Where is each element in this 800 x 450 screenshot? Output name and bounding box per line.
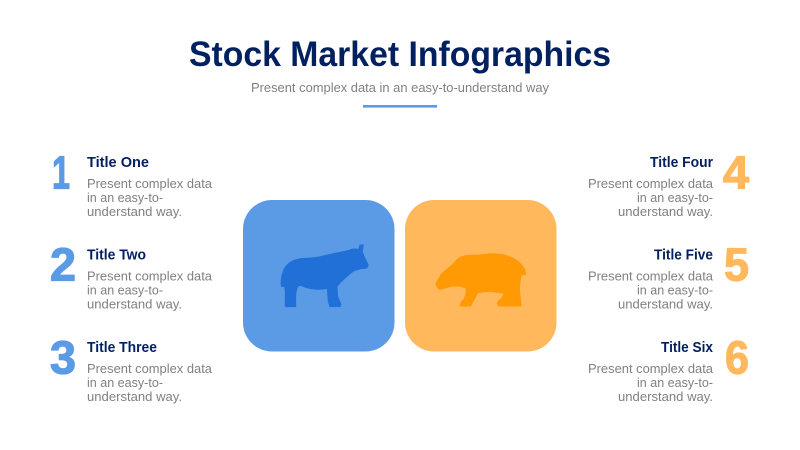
item 5 text: Present complex data: [588, 270, 713, 284]
item 3: [50, 332, 212, 404]
item 2 heading: Title Two: [87, 246, 146, 264]
item 4 heading: Title Four: [650, 154, 713, 171]
icon: bull: [281, 245, 368, 307]
title underline: [363, 105, 437, 108]
item 6 text: Present complex data: [588, 362, 713, 376]
item 6 text: understand way.: [618, 390, 713, 404]
title: Stock Market Infographics: [189, 35, 611, 74]
item 5 text: [588, 270, 713, 312]
item 1 heading: Title One: [87, 154, 149, 171]
item 3 text: Present complex data: [87, 362, 212, 376]
number 2: 2: [50, 238, 76, 290]
panel: bear: [405, 200, 556, 352]
item 1 text: Present complex data: [87, 177, 212, 191]
item 2 text: Present complex data: [87, 270, 212, 284]
item 3 text: [87, 362, 212, 404]
item 2 text: [87, 270, 212, 312]
item 5: [588, 238, 749, 312]
item 6 text: in an easy-to-: [637, 376, 713, 390]
item 6 heading: Title Six: [661, 339, 714, 356]
subtitle: Present complex data in an easy-to-understand way: [251, 80, 549, 95]
number 6: 6: [725, 332, 749, 384]
item 3 text: understand way.: [87, 390, 182, 404]
item 5 text: understand way.: [618, 298, 713, 312]
icon: bear: [436, 254, 526, 306]
item 6 text: [588, 362, 713, 404]
item 4: [588, 146, 749, 219]
item 2: [50, 238, 212, 312]
item 5 heading: Title Five: [654, 246, 713, 264]
item 3 text: in an easy-to-: [87, 376, 163, 390]
item 1: [52, 146, 212, 219]
number 1: 1: [52, 146, 70, 198]
item 6: [588, 332, 749, 404]
item 1 text: [87, 177, 212, 219]
item 4 text: Present complex data: [588, 177, 713, 191]
item 1 text: understand way.: [87, 205, 182, 219]
item 3 heading: Title Three: [87, 339, 157, 356]
number 5: 5: [724, 238, 749, 290]
item 2 text: understand way.: [87, 298, 182, 312]
number 3: 3: [50, 332, 76, 384]
item 1 text: in an easy-to-: [87, 191, 163, 205]
item 4 text: [588, 177, 713, 219]
item 5 text: in an easy-to-: [637, 284, 713, 298]
item 4 text: in an easy-to-: [637, 191, 713, 205]
item 2 text: in an easy-to-: [87, 284, 163, 298]
item 4 text: understand way.: [618, 205, 713, 219]
number 4: 4: [723, 146, 749, 198]
panel: bull: [243, 200, 394, 352]
